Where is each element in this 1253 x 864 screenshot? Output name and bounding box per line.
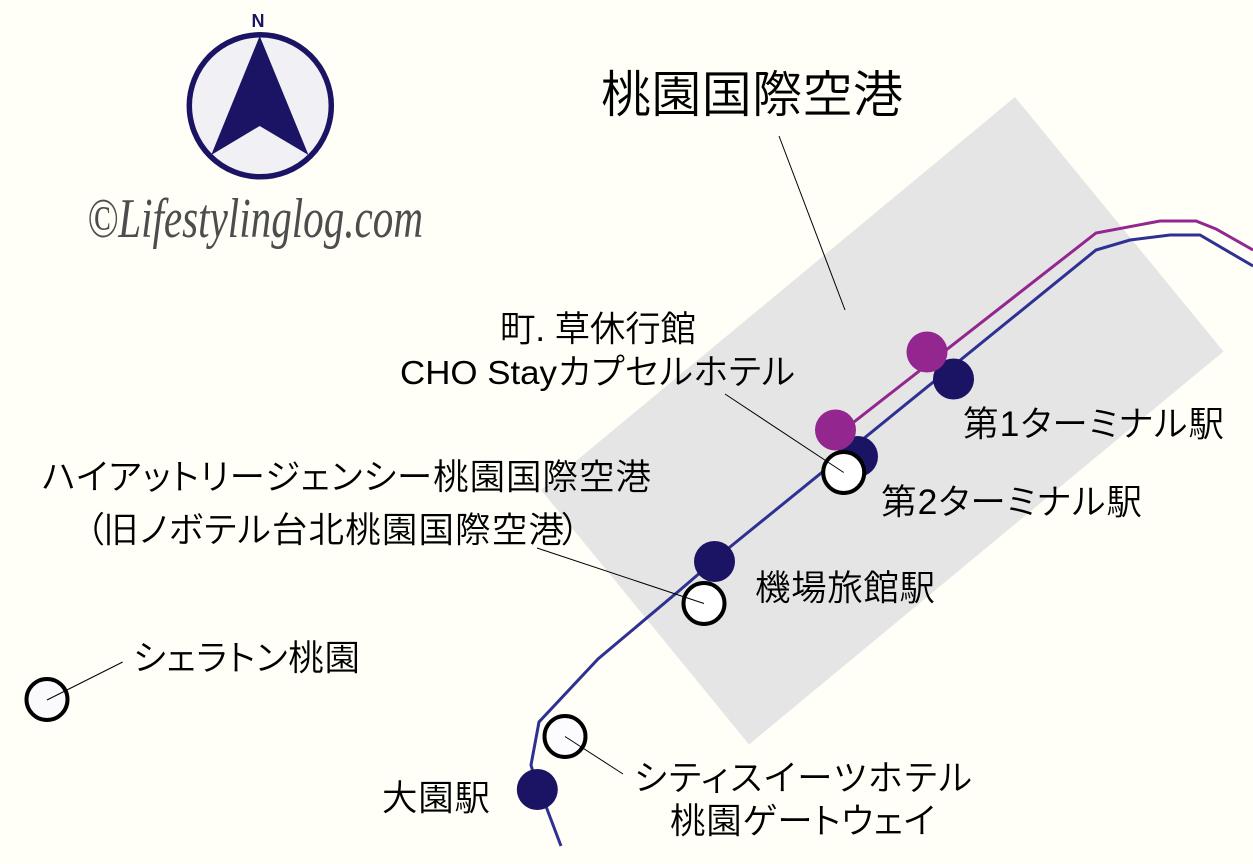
- station: dayuan: [382, 769, 558, 818]
- station: terminal 1: [906, 332, 1224, 444]
- hotel: City Suites: 桃園ゲートウェイ: [670, 801, 935, 841]
- leader: airport name: [779, 136, 845, 310]
- station: airport hotel: 機場旅館駅: [755, 568, 935, 608]
- hotel: Hyatt Regency: ハイアットリージェンシー桃園国際空港: [42, 457, 651, 497]
- watermark: ©Lifestylinglog.com: [87, 188, 423, 250]
- hotel: CHO Stay: [400, 309, 864, 493]
- hotel: Hyatt Regency: （: [86, 510, 104, 550]
- hotel: City Suites: シティスイーツホテル: [634, 758, 972, 798]
- hotel: Hyatt Regency: ）: [562, 510, 580, 550]
- hotel: City Suites: [544, 716, 972, 841]
- title: airport name: 桃園国際空港: [601, 67, 903, 123]
- icon: north compass: [189, 11, 331, 177]
- hotel: Sheraton: [26, 638, 360, 720]
- hotel: CHO Stay: CHO Stay: [400, 354, 558, 391]
- hotel: CHO Stay: 町. 草休行館: [500, 309, 696, 349]
- hotel: Hyatt Regency: [42, 457, 724, 624]
- line: blue commuter route: [531, 235, 1253, 846]
- hotel: Hyatt Regency: 旧ノボテル台北桃園国際空港: [103, 510, 564, 550]
- icon: north compass: N: [252, 11, 264, 31]
- station: terminal 2: 第2ターミナル駅: [881, 482, 1142, 522]
- hotel: Sheraton: シェラトン桃園: [133, 638, 360, 678]
- station: airport hotel: [694, 541, 935, 608]
- station: dayuan: 大園駅: [382, 778, 490, 818]
- line: purple express route: [836, 221, 1253, 436]
- hotel: CHO Stay: カプセルホテル: [558, 352, 795, 392]
- station: terminal 2: [815, 410, 1142, 522]
- station: terminal 1: 第1ターミナル駅: [963, 404, 1224, 444]
- panel: airport grounds: [541, 97, 1224, 744]
